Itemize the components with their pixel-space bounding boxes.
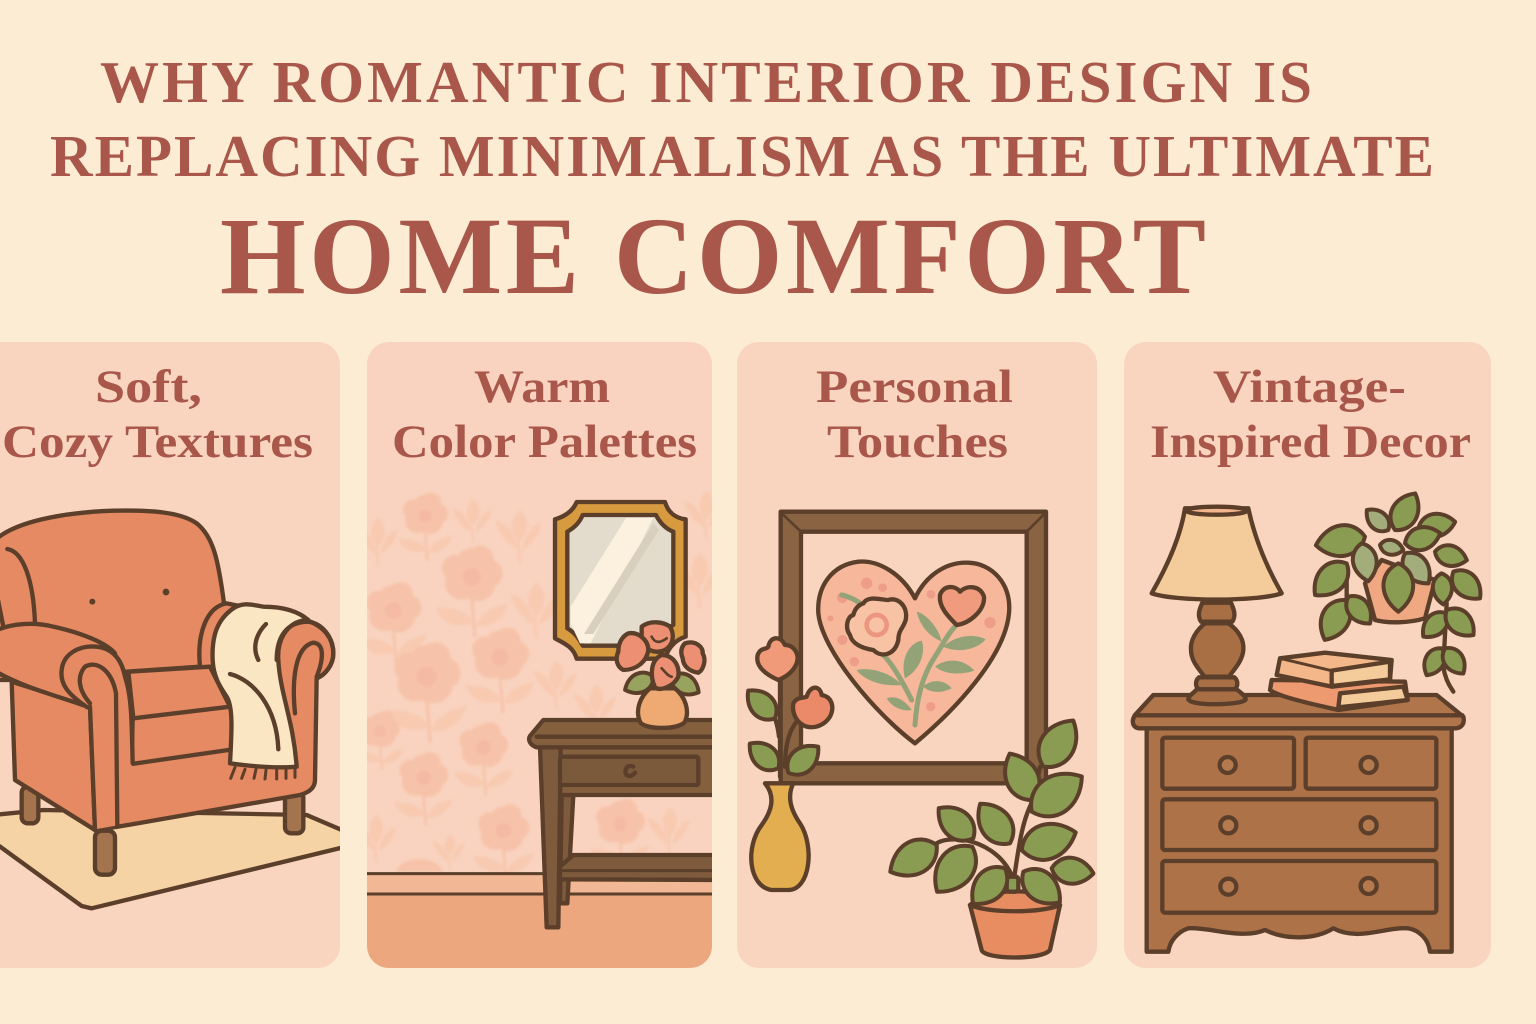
left arm top — [0, 624, 115, 707]
scroll outline — [61, 646, 133, 763]
heading: soft cozy textures: Cozy Textures — [2, 416, 313, 468]
vase with flowers — [617, 622, 704, 728]
right arm inner curl — [294, 643, 322, 713]
heart artwork — [818, 562, 1009, 743]
mirror — [555, 502, 686, 659]
heading: personal touches: Touches — [827, 416, 1008, 468]
rug — [0, 810, 343, 908]
picture frame — [781, 512, 1046, 783]
right arm outer line — [277, 622, 333, 678]
left arm scroll front — [86, 655, 132, 829]
left flowers and leaves — [740, 638, 832, 782]
seat cushion — [128, 667, 230, 718]
dresser body — [1147, 728, 1452, 952]
heading: personal touches: Personal — [816, 361, 1013, 413]
drawers — [1162, 738, 1436, 913]
seat front seams — [132, 718, 228, 764]
back legs — [22, 787, 303, 833]
baseboard — [360, 873, 727, 973]
heading: vintage-inspired decor: Inspired Decor — [1150, 416, 1471, 468]
left side panel — [12, 682, 95, 830]
panel: warm color palettes — [354, 342, 727, 973]
right arm and front body — [90, 603, 333, 830]
dresser top — [1133, 695, 1464, 728]
yellow vase — [751, 783, 809, 890]
illustration: wallpaper room — [354, 491, 727, 973]
back side seam and buttons — [0, 549, 169, 627]
heading: vintage-inspired decor — [1150, 361, 1471, 468]
heading: soft cozy textures — [2, 361, 313, 468]
illustration: dresser, lamp, books, plant — [1133, 487, 1488, 952]
console table — [529, 720, 727, 927]
chair back — [0, 511, 224, 680]
heading: warm color palettes: Warm — [474, 361, 610, 413]
potted plant — [882, 711, 1095, 958]
panel: vintage-inspired decor — [1124, 342, 1491, 968]
title: WHY ROMANTIC INTERIOR DESIGN IS — [100, 49, 1312, 115]
title — [50, 49, 1434, 317]
front leg — [95, 831, 115, 875]
throw blanket — [213, 604, 308, 779]
drawer knobs — [1220, 757, 1377, 895]
title: REPLACING MINIMALISM AS THE ULTIMATE — [50, 123, 1434, 189]
hanging plant — [1305, 487, 1488, 692]
panel: personal touches — [737, 342, 1097, 968]
left scroll inner curl — [80, 665, 117, 830]
heading: vintage-inspired decor: Vintage- — [1213, 361, 1406, 413]
heading: personal touches — [816, 361, 1013, 468]
floral wallpaper — [354, 491, 726, 881]
panel: soft, cozy textures — [0, 342, 343, 968]
illustration: heart art and plants — [740, 512, 1095, 958]
stacked books — [1270, 653, 1408, 710]
heading: warm color palettes: Color Palettes — [392, 416, 697, 468]
title: HOME COMFORT — [220, 195, 1206, 317]
stems of left flowers — [775, 677, 798, 777]
table lamp — [1152, 507, 1282, 704]
heading: soft cozy textures: Soft, — [95, 361, 202, 413]
heading: warm color palettes — [392, 361, 697, 468]
illustration: armchair on rug — [0, 511, 343, 908]
